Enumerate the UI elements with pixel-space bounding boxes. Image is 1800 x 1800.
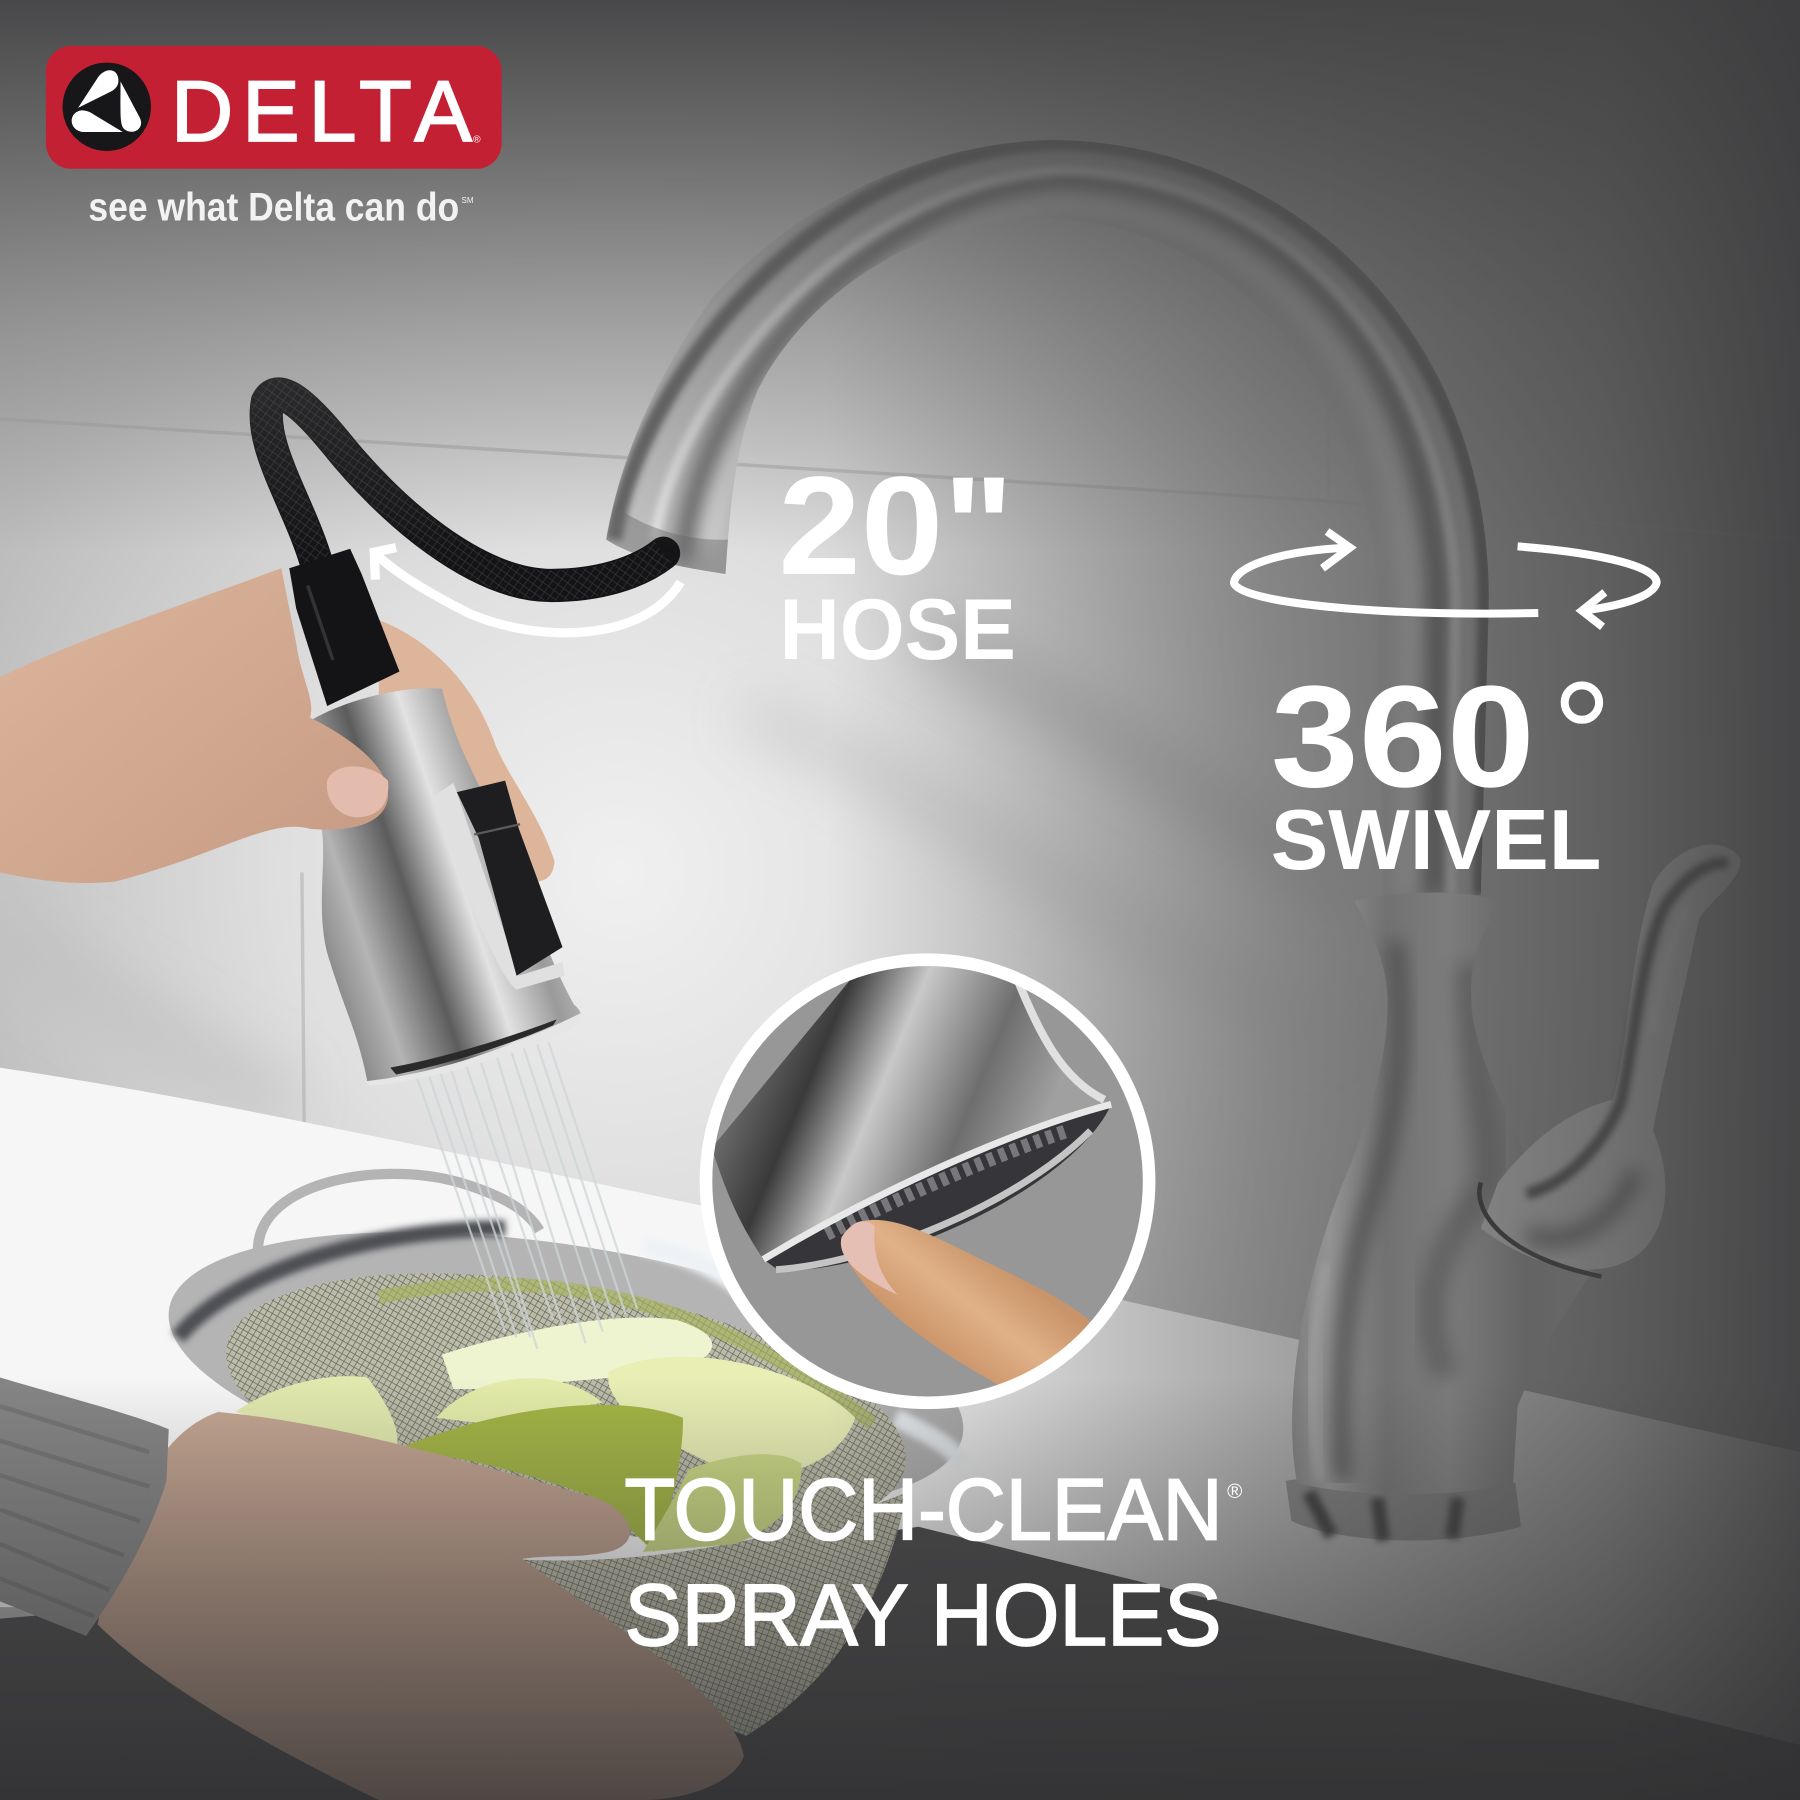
20 inch hose label: HOSE bbox=[779, 582, 1016, 678]
faucet: handle bbox=[1479, 844, 1740, 1277]
360 degree swivel label bbox=[1271, 655, 1601, 887]
thumbnail bbox=[327, 766, 388, 817]
faucet: body and base bbox=[1286, 844, 1740, 1541]
wordmark: DELTA bbox=[171, 64, 472, 160]
apple slices bbox=[235, 1318, 855, 1552]
spray selector button bbox=[430, 781, 565, 990]
lower hand holding colander bbox=[98, 1412, 744, 1800]
pull-down sprayer head bbox=[310, 688, 582, 1086]
logo mark bbox=[63, 63, 151, 151]
faucet: arched spout bbox=[606, 140, 1489, 895]
360 degree swivel label: 360 bbox=[1271, 655, 1535, 817]
sprayer bell close-up bbox=[712, 953, 1111, 1272]
inset circle: touch-clean spray holes bbox=[706, 953, 1149, 1403]
knit sleeve bbox=[0, 1378, 169, 1636]
20 inch hose label bbox=[778, 447, 1016, 678]
hose length arrow bbox=[374, 548, 681, 633]
swivel arrow bbox=[1234, 532, 1657, 627]
fingertip bbox=[843, 1220, 1090, 1384]
water spray bbox=[416, 1042, 637, 1349]
20 inch hose label: 20" bbox=[778, 447, 1014, 604]
counter front edge bbox=[0, 1527, 1800, 1800]
360 degree swivel label: SWIVEL bbox=[1271, 792, 1601, 887]
touch-clean spray holes label: TOUCH-CLEAN bbox=[624, 1461, 1223, 1558]
sprayer connector bbox=[289, 549, 399, 706]
tagline: see what Delta can do bbox=[88, 184, 459, 229]
degree ring bbox=[1565, 685, 1599, 720]
service mark: SM bbox=[461, 196, 474, 205]
registered mark: ® bbox=[473, 134, 481, 145]
upper hand: rear fingers bbox=[379, 620, 554, 882]
touch-clean spray holes label: ® bbox=[1227, 1480, 1242, 1503]
touch-clean spray holes label bbox=[624, 1461, 1242, 1664]
fingernail bbox=[841, 1221, 898, 1295]
logo badge bbox=[46, 46, 502, 169]
hose bbox=[266, 394, 664, 585]
touch-clean spray holes label: SPRAY HOLES bbox=[624, 1567, 1221, 1664]
counter top bbox=[0, 1068, 1800, 1745]
colander with handle bbox=[149, 1174, 983, 1736]
upper hand: thumb and palm bbox=[0, 568, 388, 883]
